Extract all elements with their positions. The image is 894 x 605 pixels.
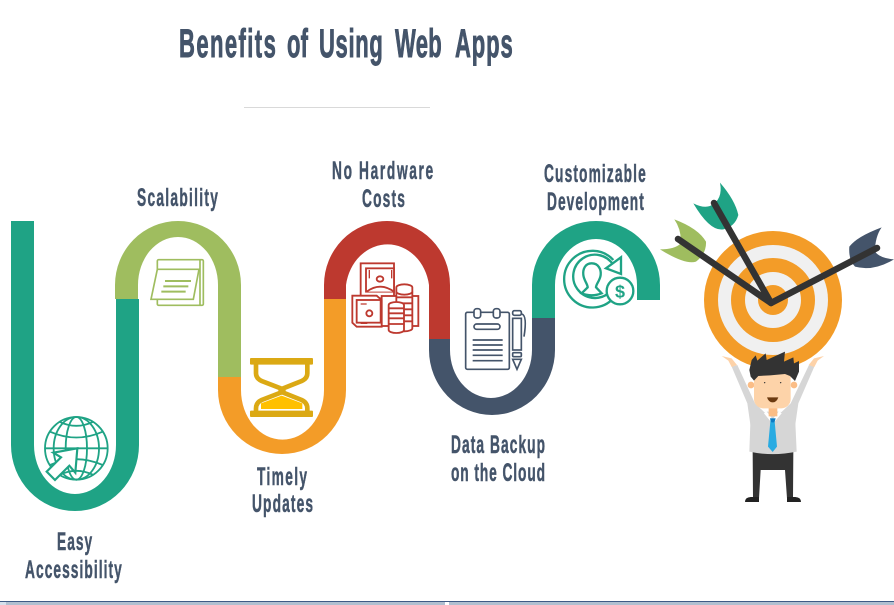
target with arrows	[660, 183, 894, 369]
title: of	[287, 21, 308, 66]
hair	[749, 352, 799, 381]
title	[179, 21, 513, 66]
label: No Hardware Costs: No Hardware	[332, 158, 433, 185]
title: Benefits	[179, 21, 276, 66]
label: Easy Accessibility: Accessibility	[25, 557, 122, 584]
label: Easy Accessibility	[25, 529, 122, 584]
label: Data Backup on the Cloud: on the Cloud	[451, 460, 545, 487]
icon: customer and dollar	[564, 251, 633, 307]
title: Using	[319, 21, 383, 66]
icon: globe with cursor	[45, 417, 108, 480]
label: Customizable Development	[544, 161, 646, 216]
segment: green arch	[115, 221, 241, 377]
segment: red arch	[324, 221, 450, 339]
label: Data Backup on the Cloud	[451, 432, 545, 487]
winding path	[11, 221, 660, 511]
icon: target	[704, 231, 842, 369]
trousers	[753, 452, 793, 498]
label: Timely Updates: Updates	[252, 491, 313, 518]
label: Scalability: Scalability	[137, 185, 218, 212]
ears	[748, 382, 754, 388]
tie	[768, 418, 777, 452]
title: Apps	[455, 21, 513, 66]
icon: hourglass	[250, 358, 313, 417]
icon: arrow shafts	[678, 203, 877, 303]
icon: clipboard and pen	[466, 309, 525, 369]
arms	[732, 365, 768, 427]
icon: arrow feathers	[660, 183, 894, 268]
segment: teal U	[11, 221, 139, 511]
label: Data Backup on the Cloud: Data Backup	[451, 432, 545, 459]
label: Timely Updates	[252, 464, 313, 518]
icon: customer and dollar: $	[615, 281, 625, 301]
label: Customizable Development: Development	[547, 189, 644, 216]
icon: money and coins	[352, 263, 418, 333]
segment: teal arch	[532, 221, 660, 318]
shirt	[749, 412, 797, 454]
label: No Hardware Costs	[332, 158, 433, 213]
label: Customizable Development: Customizable	[544, 161, 646, 188]
person holding target	[722, 352, 824, 502]
segment: orange U	[218, 299, 346, 454]
hands	[722, 356, 824, 367]
label: Timely Updates: Timely	[257, 464, 308, 491]
neck	[769, 405, 777, 416]
shoes	[745, 497, 801, 502]
icon: notepad	[151, 260, 203, 305]
title: Web	[395, 21, 442, 66]
label: Easy Accessibility: Easy	[57, 529, 93, 556]
head	[754, 367, 791, 408]
bottom window edge	[0, 601, 894, 605]
segment: navy U	[429, 318, 555, 415]
face	[767, 397, 778, 402]
label: No Hardware Costs: Costs	[362, 186, 405, 213]
